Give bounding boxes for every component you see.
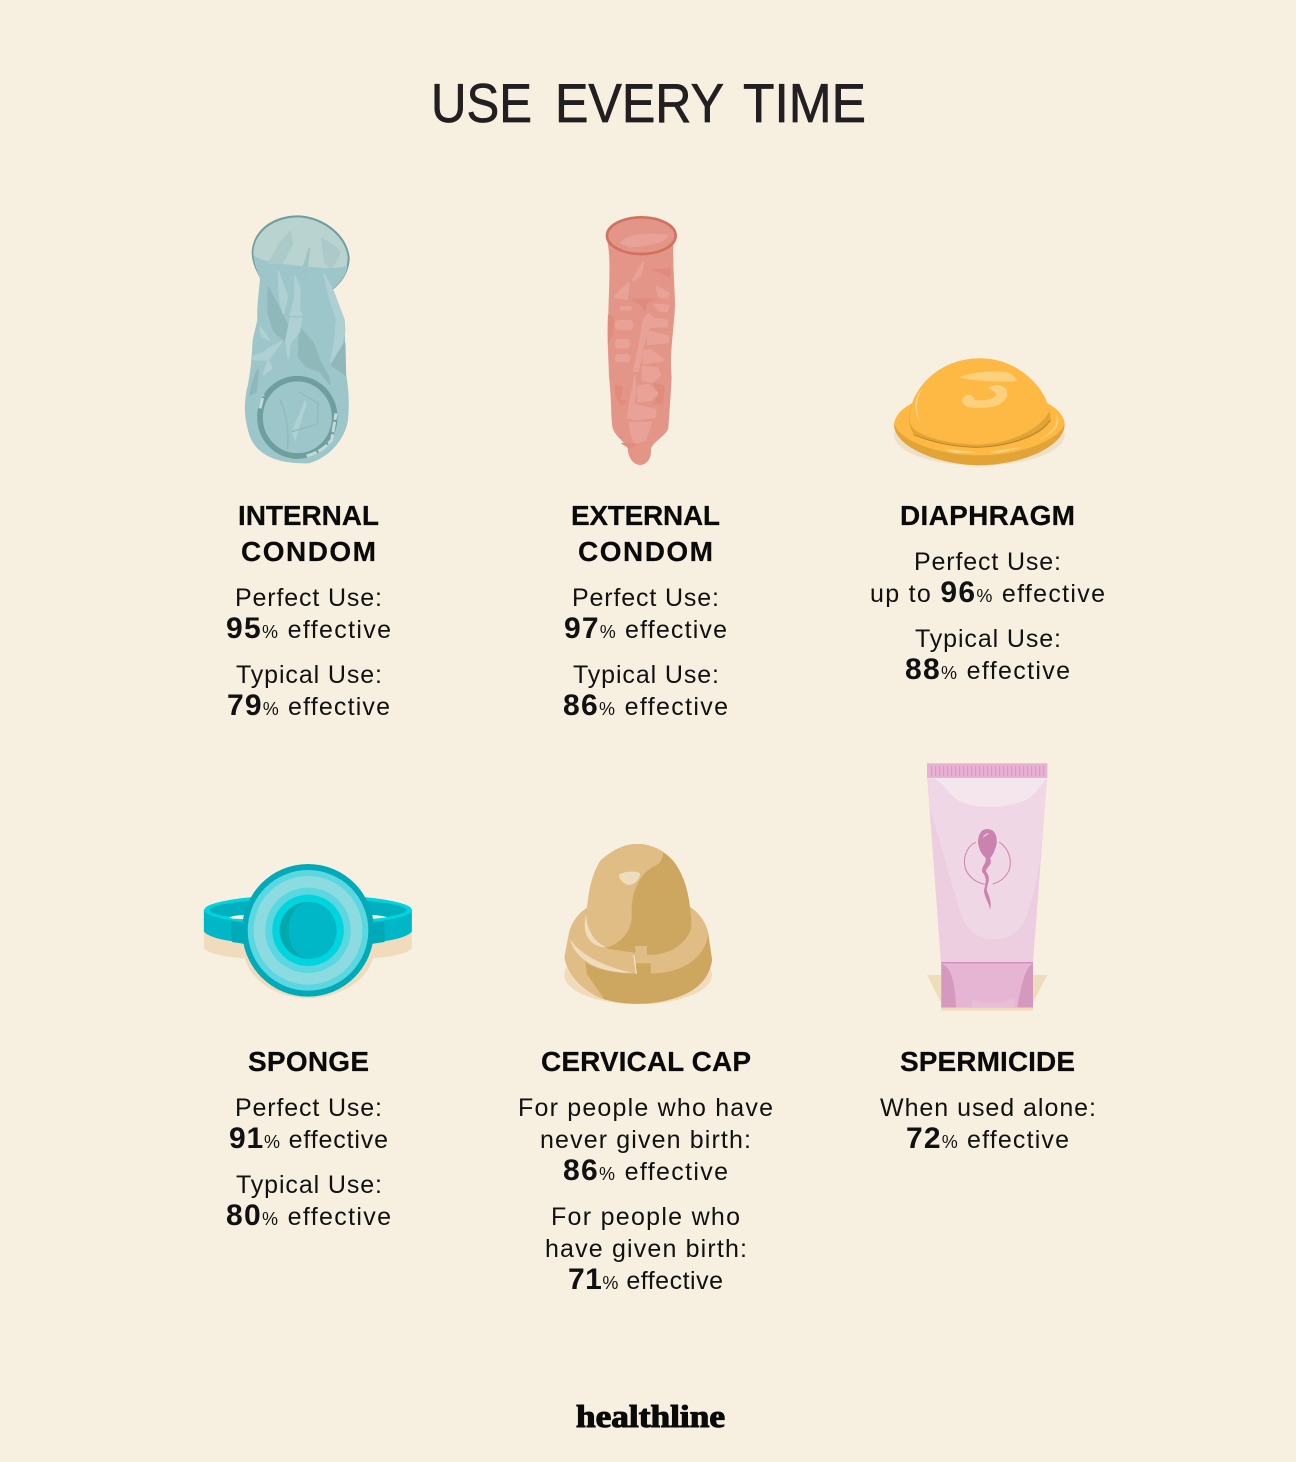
text: external condom rates: Perfect Use:	[572, 584, 719, 612]
heading: diaphragm: DIAPHRAGM	[900, 500, 1075, 531]
text: spermicide rates	[880, 1094, 1096, 1155]
title: EVERY	[555, 72, 724, 134]
text: external condom rates: Typical Use:	[573, 661, 719, 689]
text: diaphragm rates: Perfect Use:	[914, 548, 1061, 576]
title	[431, 72, 866, 134]
icon: internal condom	[245, 215, 350, 463]
icon: spermicide tube	[927, 763, 1047, 1011]
text: diaphragm rates	[870, 548, 1105, 686]
heading: internal condom	[238, 500, 379, 567]
text: sponge rates	[226, 1094, 391, 1232]
text: cervical cap rates	[518, 1094, 773, 1296]
icon: external condom	[607, 217, 676, 465]
text: cervical cap rates: 86% effective	[563, 1154, 728, 1187]
heading: internal condom: CONDOM	[241, 536, 376, 567]
text: internal condom rates: 95% effective	[226, 612, 391, 645]
heading: sponge: SPONGE	[248, 1046, 369, 1077]
title: TIME	[743, 72, 866, 134]
icon: sponge	[204, 864, 412, 998]
panel: internal condom	[226, 215, 391, 722]
heading: external condom: EXTERNAL	[571, 500, 720, 531]
panel: sponge	[204, 864, 412, 1232]
text: cervical cap rates: For people who have	[518, 1094, 773, 1122]
text: internal condom rates: Perfect Use:	[235, 584, 382, 612]
logo: healthline: healthline	[576, 1398, 725, 1434]
text: external condom rates	[563, 584, 728, 722]
panel: spermicide	[880, 763, 1096, 1155]
text: sponge rates: Perfect Use:	[235, 1094, 382, 1122]
panel: diaphragm	[870, 358, 1105, 686]
text: sponge rates: 80% effective	[226, 1199, 391, 1232]
panel: cervical cap	[518, 844, 773, 1296]
text: internal condom rates: 79% effective	[227, 689, 390, 722]
text: sponge rates: Typical Use:	[236, 1171, 382, 1199]
text: cervical cap rates: 71% effective	[568, 1263, 723, 1296]
heading: external condom: CONDOM	[578, 536, 713, 567]
icon: cervical cap	[564, 844, 712, 1004]
text: internal condom rates: Typical Use:	[236, 661, 382, 689]
text: cervical cap rates: have given birth:	[545, 1235, 747, 1263]
heading: external condom	[571, 500, 720, 567]
heading: cervical cap: CERVICAL CAP	[541, 1046, 751, 1077]
text: sponge rates: 91% effective	[229, 1122, 388, 1155]
heading: spermicide: SPERMICIDE	[900, 1046, 1075, 1077]
text: diaphragm rates: Typical Use:	[915, 625, 1061, 653]
text: diaphragm rates: 88% effective	[905, 653, 1070, 686]
text: diaphragm rates: up to 96% effective	[870, 576, 1105, 609]
text: spermicide rates: 72% effective	[906, 1122, 1069, 1155]
text: internal condom rates	[226, 584, 391, 722]
text: external condom rates: 86% effective	[563, 689, 728, 722]
text: cervical cap rates: never given birth:	[540, 1126, 751, 1154]
text: spermicide rates: When used alone:	[880, 1094, 1096, 1122]
title: USE	[431, 72, 532, 134]
text: cervical cap rates: For people who	[551, 1203, 740, 1231]
heading: internal condom: INTERNAL	[238, 500, 379, 531]
text: external condom rates: 97% effective	[564, 612, 727, 645]
icon: diaphragm	[894, 358, 1065, 466]
panel: external condom	[563, 217, 728, 722]
